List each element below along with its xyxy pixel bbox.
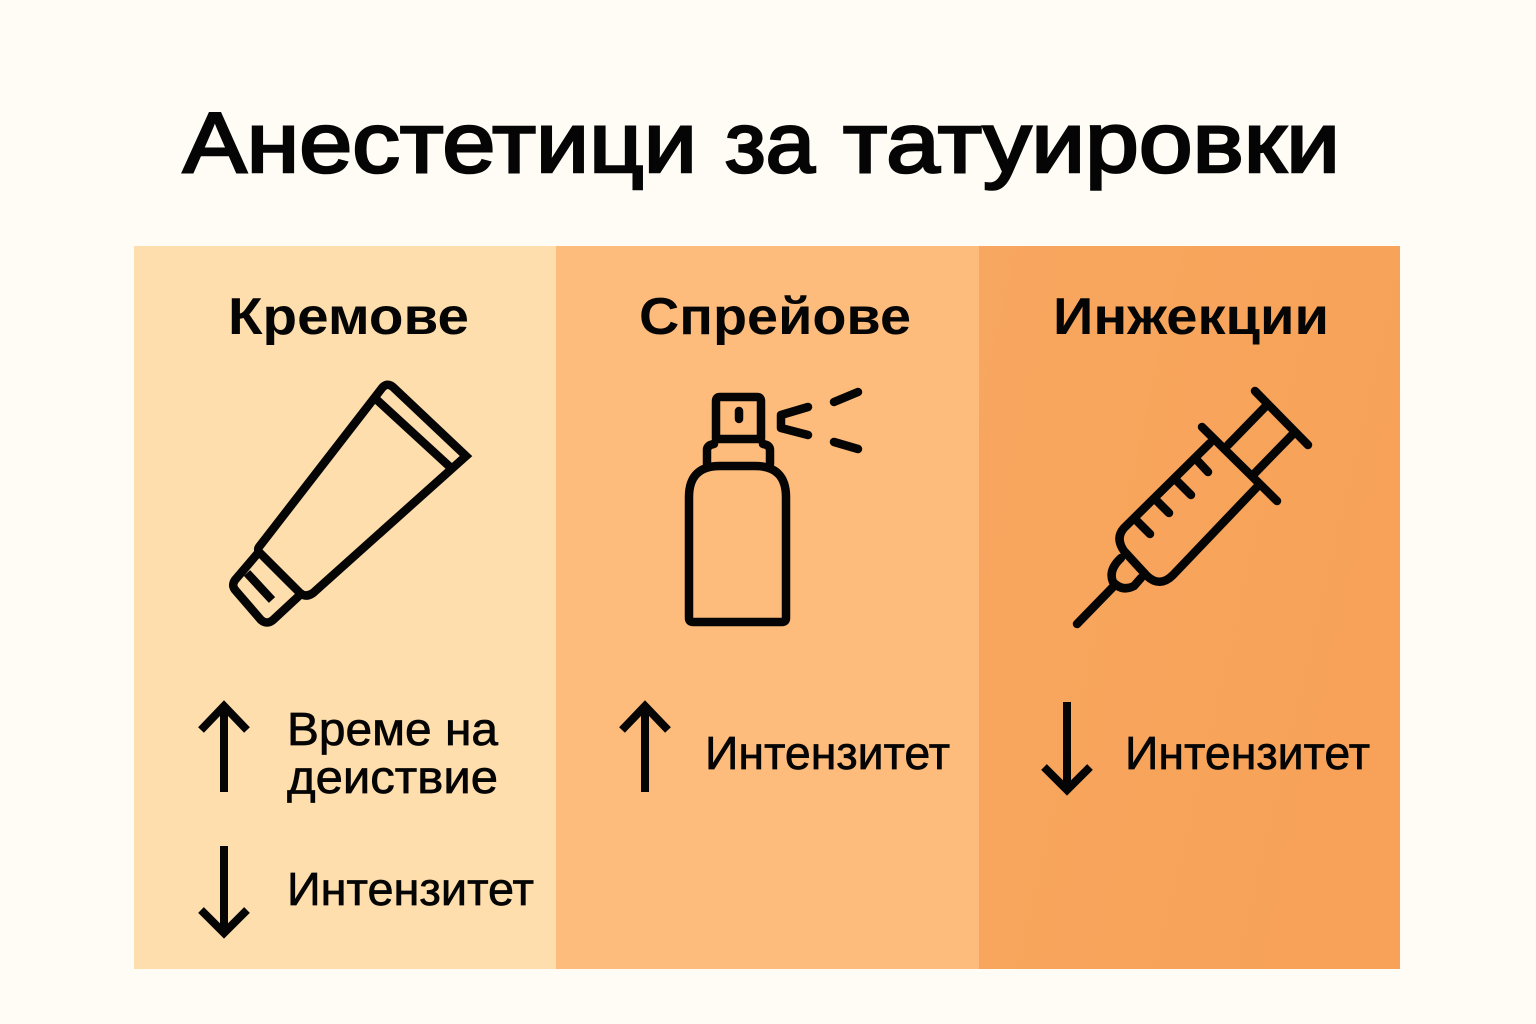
heading: creams: Кремове xyxy=(228,288,469,346)
icon: spray bottle xyxy=(689,392,858,622)
arrow up: intensity xyxy=(622,706,668,792)
arrow down: intensity xyxy=(201,846,247,933)
arrow up: action time xyxy=(201,706,247,792)
panel: creams xyxy=(134,246,556,969)
text: action time xyxy=(287,703,498,803)
panel: sprays xyxy=(556,246,979,969)
title xyxy=(183,96,1340,191)
title: Анестетици xyxy=(183,96,697,191)
heading: sprays: Спрейове xyxy=(639,288,911,346)
title: татуировки xyxy=(843,96,1340,191)
text: intensity: Интензитет xyxy=(287,863,534,915)
title: за xyxy=(725,96,816,191)
text: intensity: Интензитет xyxy=(705,727,950,779)
arrow down: intensity xyxy=(1044,702,1090,790)
heading: injections: Инжекции xyxy=(1053,288,1329,346)
text: intensity: Интензитет xyxy=(1125,727,1370,779)
text: action time: Време на xyxy=(287,703,498,755)
text: action time: деиствие xyxy=(287,751,498,803)
icon: syringe xyxy=(1077,391,1308,624)
icon: cream tube xyxy=(233,385,466,622)
panel: injections xyxy=(979,246,1400,969)
